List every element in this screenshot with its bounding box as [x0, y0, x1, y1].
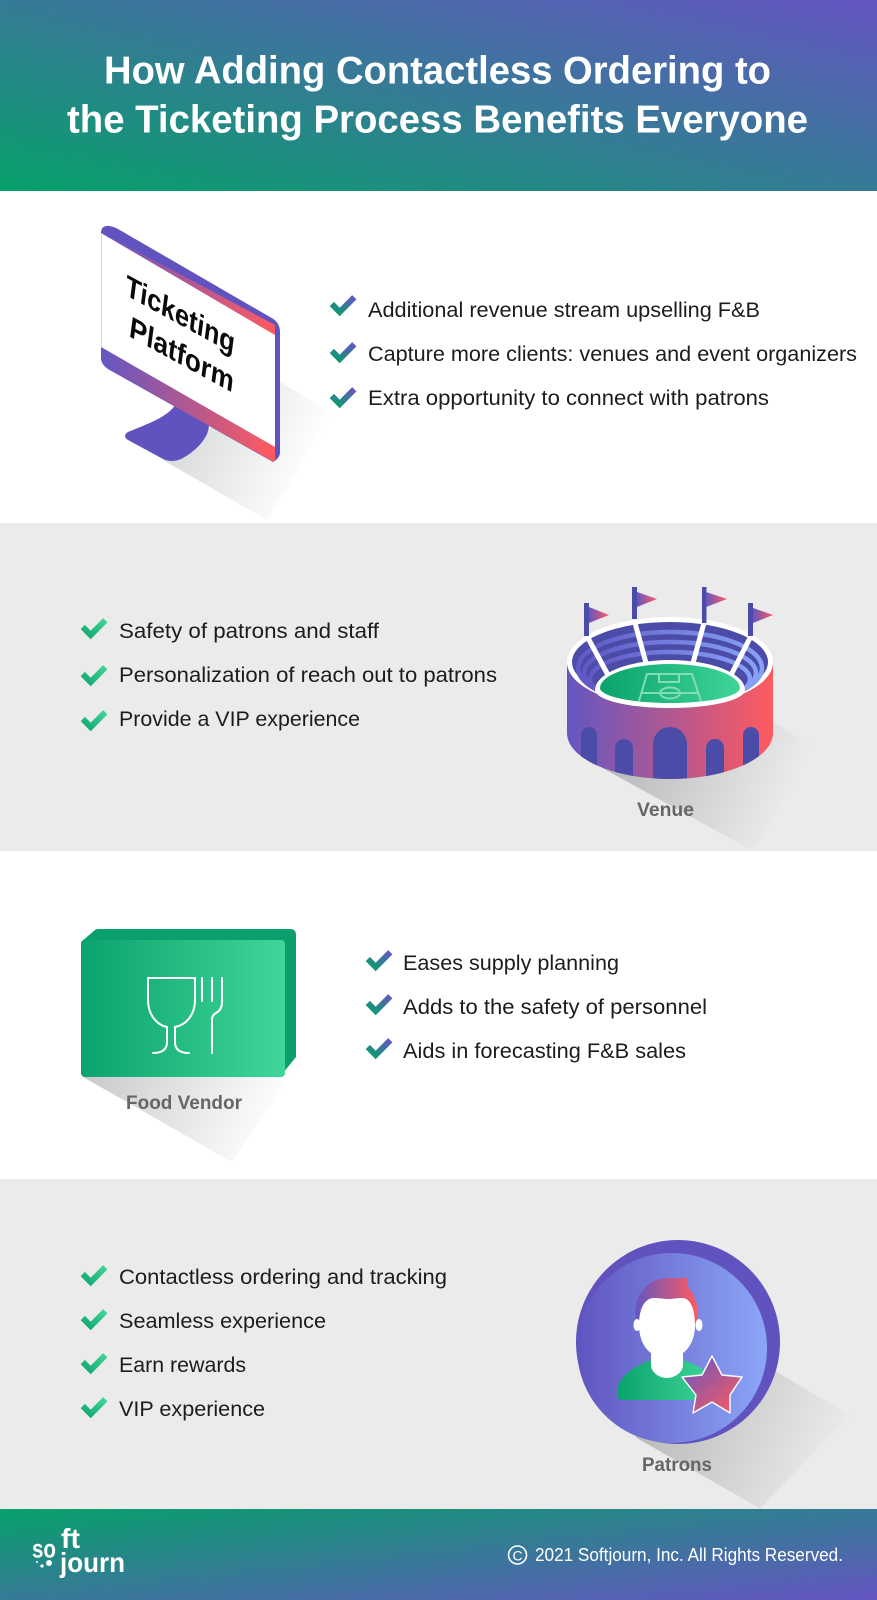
check list: patrons [83, 1266, 447, 1421]
panel: venue [0, 523, 877, 851]
header banner [0, 0, 877, 191]
check list: ticketing platform: Extra opportunity to connect with patrons [368, 387, 769, 410]
check list: ticketing platform: Capture more clients: venues and event organizers [368, 343, 857, 366]
copyright: 2021 Softjourn, Inc. All Rights Reserved. [535, 1545, 843, 1565]
title: How Adding Contactless Ordering to [104, 50, 771, 92]
panel: ticketing platform [101, 226, 857, 520]
check list: patrons: Seamless experience [119, 1310, 326, 1333]
check list: food vendor: Adds to the safety of personnel [403, 996, 707, 1019]
icon: monitor: Platform [128, 310, 236, 399]
label: patrons: Patrons [642, 1455, 712, 1476]
panel: patrons [0, 1179, 877, 1509]
check list: food vendor: Aids in forecasting F&B sales [403, 1040, 686, 1063]
check list: ticketing platform: Additional revenue stream upselling F&B [368, 299, 760, 322]
check list: food vendor: Eases supply planning [403, 952, 619, 975]
check list: ticketing platform [332, 297, 857, 410]
check list: patrons: VIP experience [119, 1398, 265, 1421]
logo: softjourn: ft [61, 1523, 80, 1554]
check list: venue: Provide a VIP experience [119, 708, 360, 731]
icon: patron badge [576, 1240, 850, 1508]
check list: patrons: Earn rewards [119, 1354, 246, 1377]
title: the Ticketing Process Benefits Everyone [67, 98, 808, 142]
logo: softjourn: journ [59, 1547, 125, 1578]
icon: stadium [567, 587, 786, 844]
check list: venue: Safety of patrons and staff [119, 620, 379, 643]
logo: softjourn [32, 1523, 125, 1578]
icon: food vendor card [81, 929, 303, 1162]
footer [0, 1509, 877, 1600]
panel: food vendor [81, 929, 707, 1162]
check list: food vendor [368, 952, 707, 1063]
check list: venue [83, 620, 497, 731]
copyright: C [512, 1548, 523, 1564]
label: venue: Venue [637, 800, 694, 821]
title [67, 50, 808, 142]
check list: patrons: Contactless ordering and tracking [119, 1266, 447, 1289]
icon: monitor: Ticketing [124, 269, 237, 360]
check list: venue: Personalization of reach out to patrons [119, 664, 497, 687]
icon: monitor [101, 226, 333, 520]
label: food vendor: Food Vendor [126, 1093, 243, 1114]
logo: softjourn: so [32, 1534, 56, 1564]
